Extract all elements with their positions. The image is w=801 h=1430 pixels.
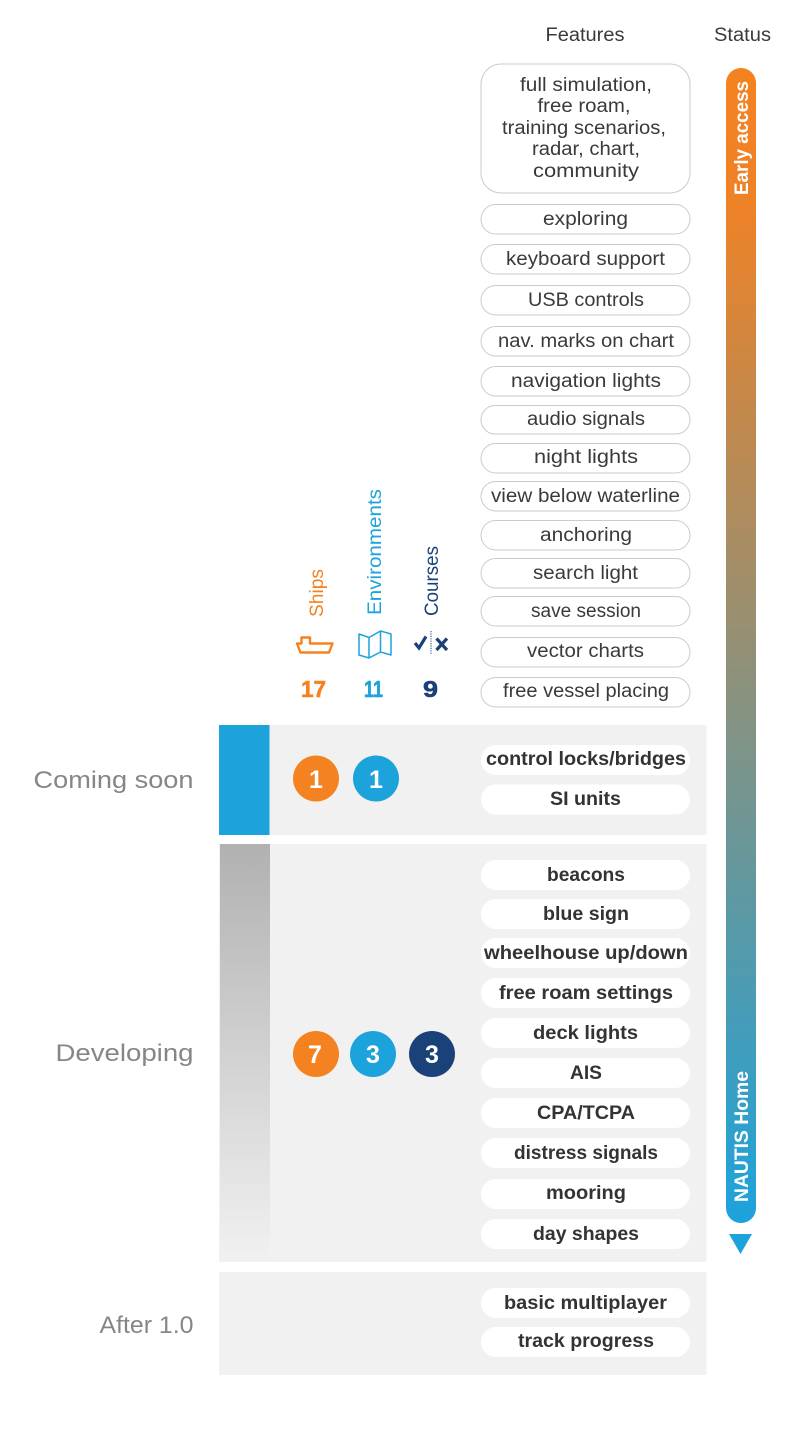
column: Courses: [415, 546, 447, 702]
feature: save session: [481, 596, 690, 626]
panel: released features: [481, 64, 690, 707]
feature: control locks/bridges: control locks/bridges: [486, 749, 686, 770]
feature: day shapes: day shapes: [533, 1224, 639, 1245]
feature: free roam settings: [481, 978, 690, 1008]
label: NAUTIS Home: NAUTIS Home: [732, 1071, 753, 1202]
icon: check and cross: [415, 631, 447, 655]
feature: audio signals: [481, 406, 690, 434]
badge: ships 1: [293, 756, 339, 802]
feature: vector charts: vector charts: [527, 641, 644, 662]
feature: track progress: [481, 1327, 690, 1357]
feature: SI units: [481, 784, 690, 814]
feature: blue sign: [481, 899, 690, 929]
feature: beacons: beacons: [547, 865, 625, 886]
feature: audio signals: audio signals: [527, 409, 645, 430]
feature: mooring: mooring: [546, 1183, 626, 1204]
feature: exploring: [481, 204, 690, 234]
status bar: [726, 68, 756, 1223]
feature: deck lights: [481, 1018, 690, 1048]
feature: navigation lights: navigation lights: [511, 371, 661, 392]
feature: anchoring: [481, 520, 690, 550]
feature: keyboard support: [481, 244, 690, 274]
feature: save session: save session: [531, 601, 641, 622]
feature: control locks/bridges: [481, 745, 690, 775]
feature: mooring: [481, 1179, 690, 1209]
feature: blue sign: blue sign: [543, 904, 629, 925]
feature: core feature group: [481, 64, 690, 193]
label: Ships: Ships: [307, 569, 328, 617]
feature: AIS: AIS: [570, 1063, 602, 1084]
feature: exploring: exploring: [543, 209, 628, 230]
feature: search light: search light: [533, 563, 639, 584]
badge: environments 1: 1: [369, 766, 383, 794]
column: Environments: [359, 489, 391, 702]
feature: nav. marks on chart: [481, 326, 690, 356]
label: Developing: Developing: [56, 1040, 194, 1067]
feature: night lights: [481, 444, 690, 473]
feature: nav. marks on chart: nav. marks on chart: [498, 331, 675, 352]
label: Coming soon: Coming soon: [34, 767, 194, 794]
feature: core feature group: radar, chart,: [532, 139, 640, 160]
badge: ships 1: 1: [309, 766, 323, 794]
badge: ships 7: 7: [308, 1041, 322, 1069]
feature: free vessel placing: [481, 678, 690, 707]
feature: free roam settings: free roam settings: [499, 983, 673, 1004]
panel: Developing: [56, 844, 706, 1262]
feature: CPA/TCPA: CPA/TCPA: [537, 1103, 635, 1124]
feature: deck lights: deck lights: [533, 1023, 638, 1044]
feature: free vessel placing: free vessel placing: [503, 681, 669, 702]
feature: core feature group: full simulation,: [520, 75, 652, 96]
count: 9 courses: 9: [423, 676, 438, 702]
count: 17 ships: 17: [301, 676, 326, 702]
feature: distress signals: distress signals: [514, 1143, 658, 1164]
badge: courses 3: 3: [425, 1041, 439, 1069]
badge: courses 3: [409, 1031, 455, 1077]
status marker: coming soon: [219, 725, 270, 835]
count: 11 environments: 11: [364, 676, 383, 702]
feature: view below waterline: view below waterline: [491, 486, 680, 507]
panel: Coming soon: [34, 725, 706, 835]
feature: track progress: track progress: [518, 1331, 654, 1352]
feature: anchoring: anchoring: [540, 525, 632, 546]
feature: core feature group: community: [533, 161, 640, 182]
feature: core feature group: training scenarios,: [502, 118, 666, 139]
feature: USB controls: USB controls: [528, 290, 644, 311]
column: Ships: [297, 569, 332, 702]
label: After 1.0: After 1.0: [100, 1312, 194, 1339]
feature: beacons: [481, 860, 690, 890]
feature: navigation lights: [481, 366, 690, 396]
feature: day shapes: [481, 1219, 690, 1249]
feature: vector charts: [481, 638, 690, 667]
feature: USB controls: [481, 286, 690, 315]
feature: keyboard support: keyboard support: [506, 249, 666, 270]
feature: view below waterline: [481, 482, 690, 511]
feature: CPA/TCPA: [481, 1098, 690, 1128]
feature: distress signals: [481, 1138, 690, 1168]
label: Environments: Environments: [365, 489, 386, 615]
arrow: status direction: [729, 1234, 752, 1254]
icon: ship: [297, 638, 332, 652]
feature: search light: [481, 558, 690, 588]
feature: basic multiplayer: basic multiplayer: [504, 1293, 668, 1314]
feature: wheelhouse up/down: [481, 938, 690, 968]
badge: environments 3: 3: [366, 1041, 380, 1069]
badge: environments 1: [353, 756, 399, 802]
label: Courses: Courses: [422, 546, 443, 616]
heading: Status: Status: [714, 25, 771, 46]
feature: wheelhouse up/down: wheelhouse up/down: [483, 943, 688, 964]
label: Early access: Early access: [732, 81, 753, 195]
status marker: developing: [220, 844, 270, 1262]
heading: Features: Features: [546, 25, 624, 46]
feature: night lights: night lights: [534, 447, 638, 468]
badge: environments 3: [350, 1031, 396, 1077]
feature: basic multiplayer: [481, 1288, 690, 1318]
icon: map: [359, 631, 391, 658]
feature: core feature group: free roam,: [538, 96, 630, 117]
badge: ships 7: [293, 1031, 339, 1077]
feature: SI units: SI units: [550, 789, 621, 810]
panel: After 1.0: [100, 1272, 706, 1375]
feature: AIS: [481, 1058, 690, 1088]
